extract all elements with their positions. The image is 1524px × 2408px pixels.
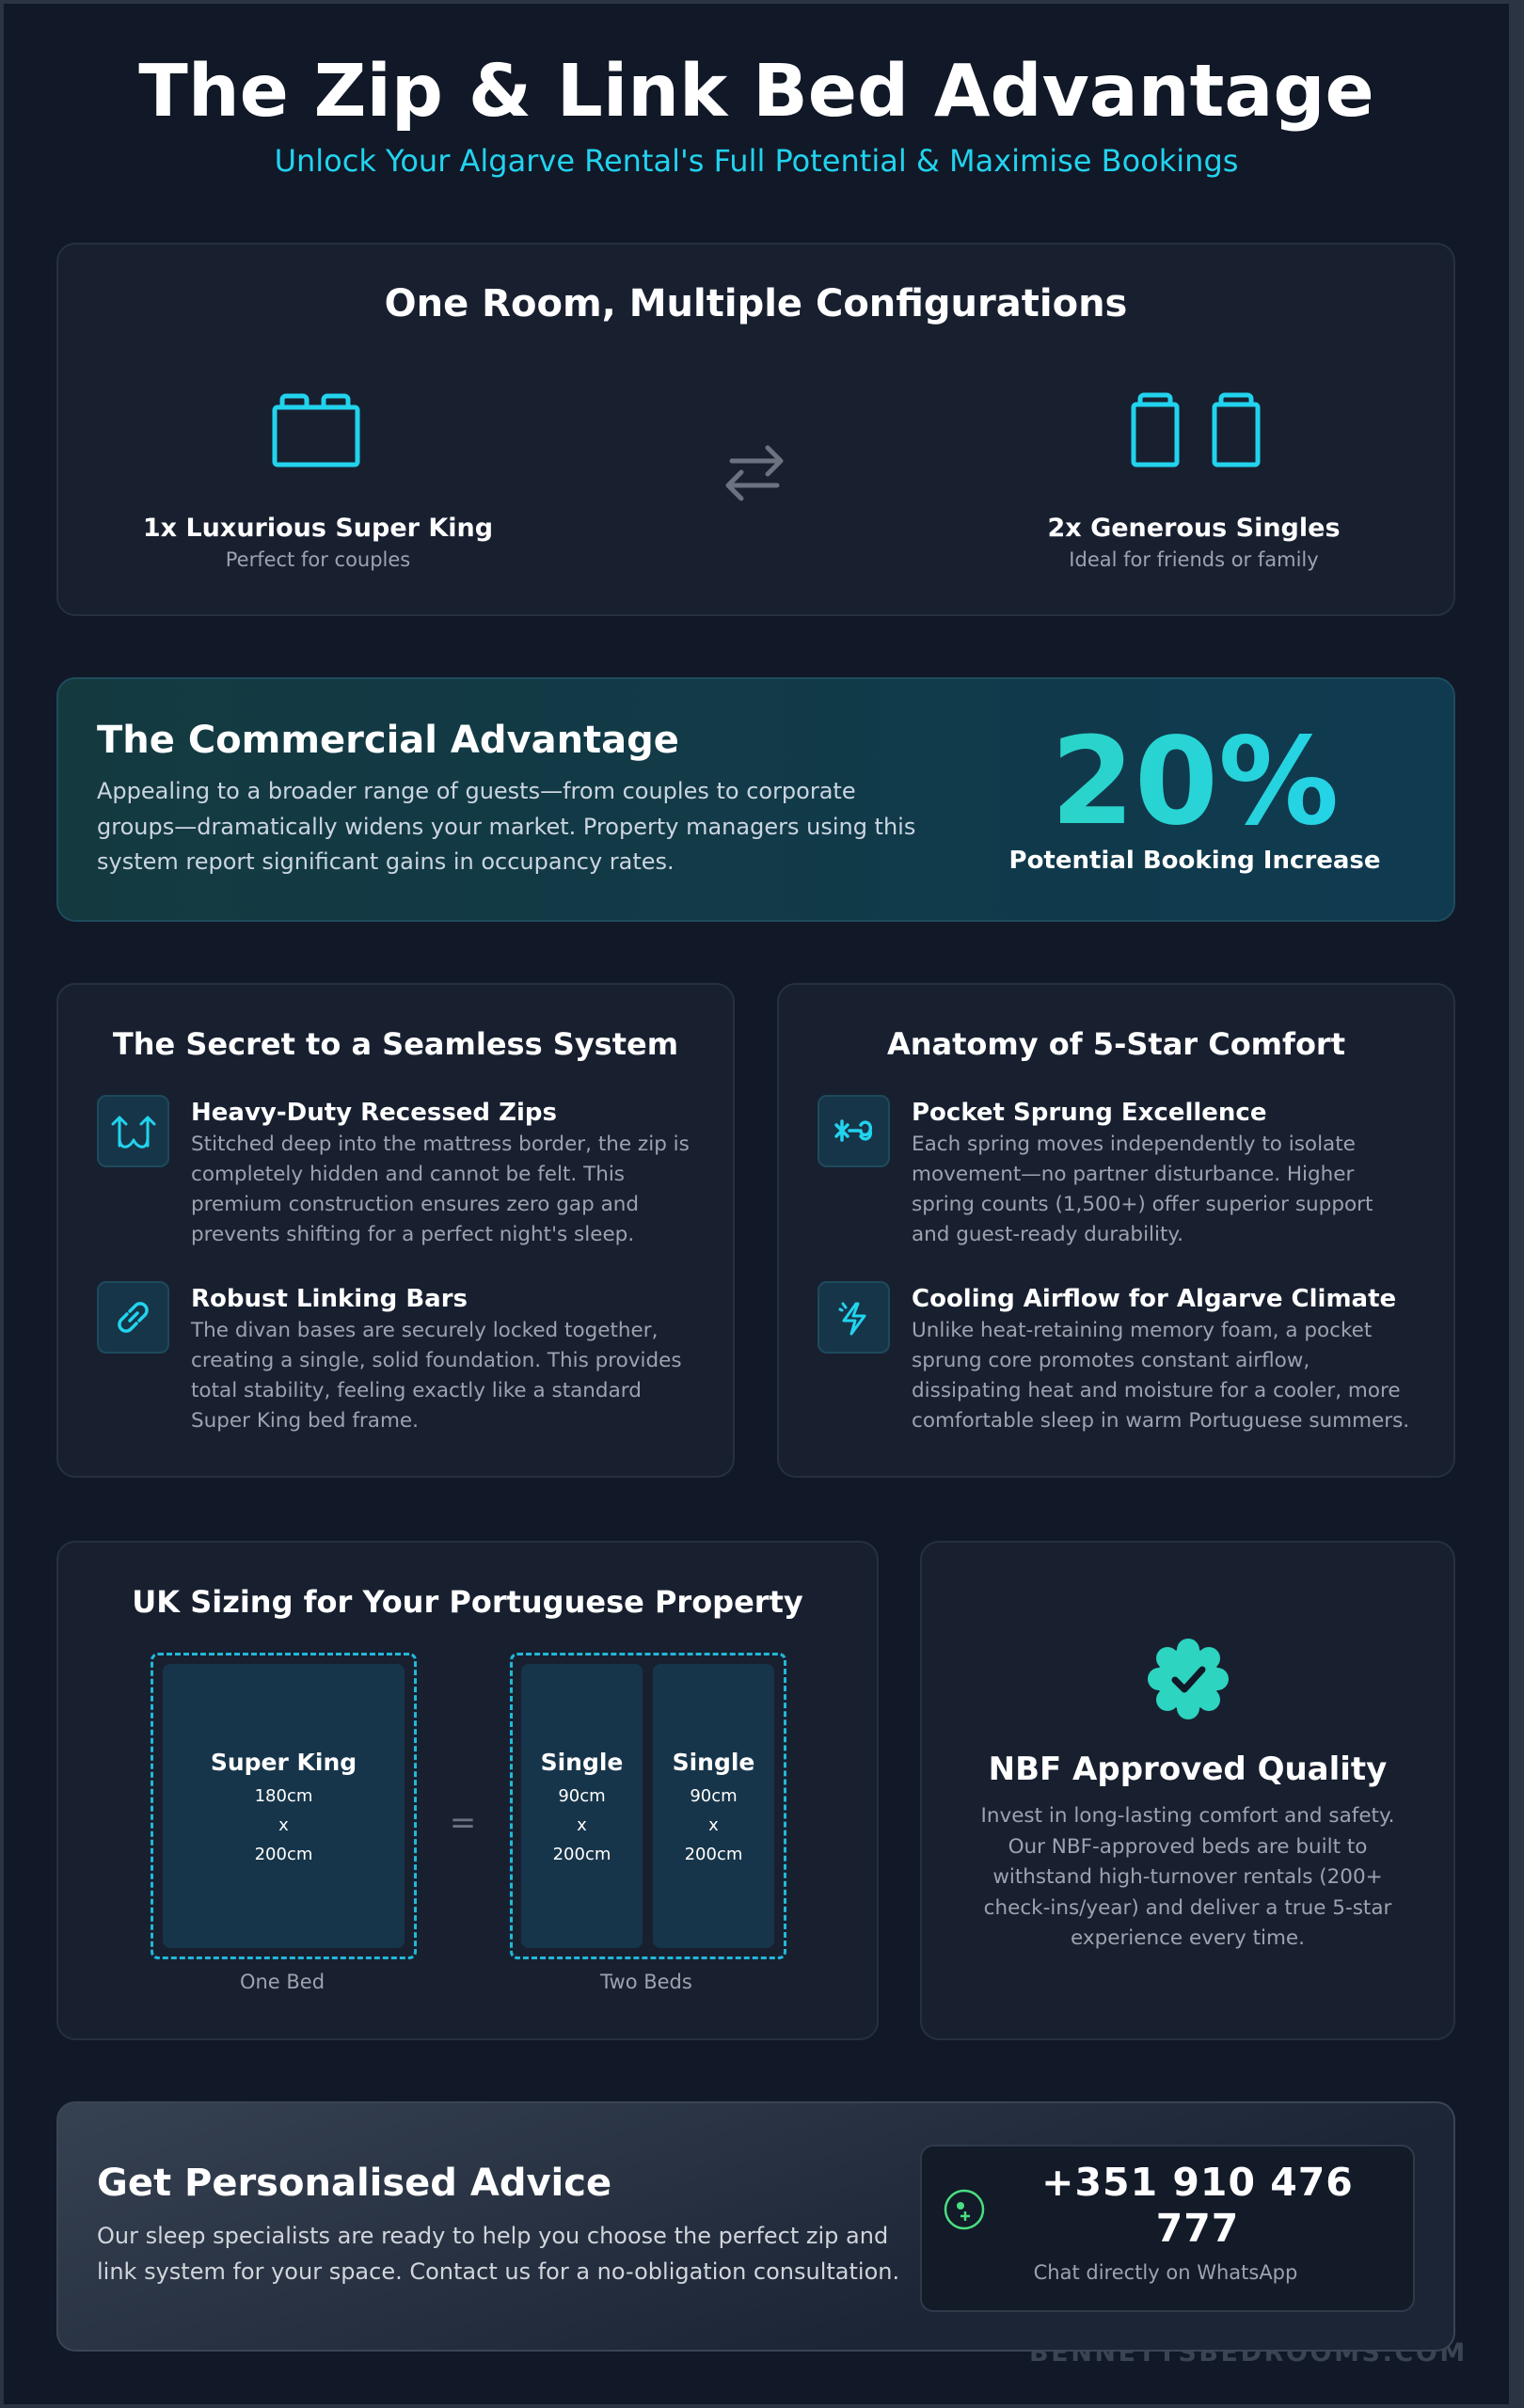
icon: verified badge	[1148, 1639, 1229, 1719]
panel: seamless system	[56, 983, 735, 1478]
item: linking bars: Robust Linking Bars	[191, 1285, 468, 1313]
item: pocket sprung: Pocket Sprung Excellence	[912, 1099, 1266, 1127]
heading: sizing: UK Sizing for Your Portuguese Property	[132, 1584, 803, 1620]
panel: configurations	[56, 243, 1455, 616]
panel: anatomy: Unlike heat-retaining memory foam, a pocket sprung core promotes constant airflow, dissipating heat and moisture for a cooler, more comfortable sleep in warm Portuguese summers.	[912, 1319, 1409, 1433]
text: singles: Ideal for friends or family	[1069, 548, 1319, 571]
heading: configurations: One Room, Multiple Configurations	[385, 282, 1127, 325]
icon: super king bed	[273, 393, 359, 467]
diagram: one bed: 200cm	[255, 1845, 312, 1864]
panel: nbf quality	[920, 1541, 1455, 2040]
heading: advice: Get Personalised Advice	[97, 2162, 611, 2205]
icon: springs	[818, 1095, 890, 1167]
item: zips: Heavy-Duty Recessed Zips	[191, 1099, 557, 1127]
label: two beds: Two Beds	[600, 1971, 692, 1993]
heading: seamless: The Secret to a Seamless System	[113, 1026, 678, 1062]
icon: link	[97, 1281, 169, 1354]
text: singles: 2x Generous Singles	[1047, 514, 1341, 543]
panel: personalised advice	[56, 2101, 1455, 2352]
equals sign: =	[450, 1804, 476, 1842]
phone number: +351 910 476 777	[1041, 2160, 1354, 2251]
stat: 20%	[1009, 712, 1380, 875]
subtitle: Unlock Your Algarve Rental's Full Potential & Maximise Bookings	[275, 143, 1238, 179]
stat: 20%: 20%	[1051, 712, 1339, 852]
panel: seamless system: Stitched deep into the mattress border, the zip is completely hidden and cannot be felt. This premium construction ensures zero gap and prevents shifting for a perfect night's sleep.	[191, 1133, 690, 1246]
diagram: two beds: x	[577, 1815, 587, 1835]
item: cooling: Cooling Airflow for Algarve Climate	[912, 1285, 1396, 1313]
diagram: one bed	[151, 1653, 417, 1959]
heading: nbf: NBF Approved Quality	[989, 1751, 1387, 1788]
paragraph: nbf: Invest in long-lasting comfort and safety. Our NBF-approved beds are built to withstand high-turnover rentals (200+ check-ins/year) and deliver a true 5-star experience every time.	[981, 1804, 1394, 1950]
diagram: two beds: 200cm	[553, 1845, 611, 1864]
text: super king: 1x Luxurious Super King	[143, 514, 493, 543]
diagram: two beds	[510, 1653, 786, 1959]
text: singles	[1047, 514, 1341, 571]
icon: whatsapp	[945, 2190, 984, 2229]
panel: commercial advantage	[56, 677, 1455, 922]
diagram: one bed: Super King	[211, 1749, 357, 1776]
contact box	[920, 2145, 1415, 2312]
icon: zip	[97, 1095, 169, 1167]
heading: anatomy: Anatomy of 5-Star Comfort	[887, 1026, 1345, 1062]
diagram: two beds: 90cm	[690, 1786, 738, 1806]
diagram: two beds: x	[708, 1815, 719, 1835]
heading: commercial: The Commercial Advantage	[97, 719, 679, 762]
diagram: one bed: x	[278, 1815, 289, 1835]
caption: whatsapp: Chat directly on WhatsApp	[1034, 2261, 1297, 2284]
panel: anatomy	[777, 983, 1455, 1478]
diagram: two beds: Single	[673, 1749, 754, 1776]
icon: swap arrows	[726, 446, 783, 500]
stat: 20%: Potential Booking Increase	[1009, 847, 1380, 875]
panel: anatomy: Each spring moves independently to isolate movement—no partner disturbance. Higher spring counts (1,500+) offer superior support and guest-ready durability.	[912, 1133, 1373, 1246]
icon: bolt	[818, 1281, 890, 1354]
text: super king	[143, 514, 493, 571]
icon: two singles	[1131, 393, 1261, 467]
text: super king: Perfect for couples	[226, 548, 410, 571]
title: The Zip & Link Bed Advantage	[138, 50, 1374, 134]
label: one bed: One Bed	[240, 1971, 325, 1993]
diagram: two beds: 90cm	[558, 1786, 606, 1806]
diagram: one bed: 180cm	[255, 1786, 312, 1806]
panel: seamless system: The divan bases are securely locked together, creating a single, solid foundation. This provides total stability, feeling exactly like a standard Super King bed frame.	[191, 1319, 682, 1433]
watermark: BENNETTSBEDROOMS.COM	[1029, 2338, 1468, 2368]
diagram: two beds: 200cm	[685, 1845, 742, 1864]
panel: uk sizing	[56, 1541, 879, 2040]
paragraph: advice: Our sleep specialists are ready to help you choose the perfect zip and link system for your space. Contact us for a no-obligation consultation.	[97, 2223, 899, 2285]
diagram: two beds: Single	[541, 1749, 623, 1776]
paragraph: commercial: Appealing to a broader range of guests—from couples to corporate groups—dramatically widens your market. Property managers using this system report significant gains in occupancy rates.	[97, 778, 915, 875]
